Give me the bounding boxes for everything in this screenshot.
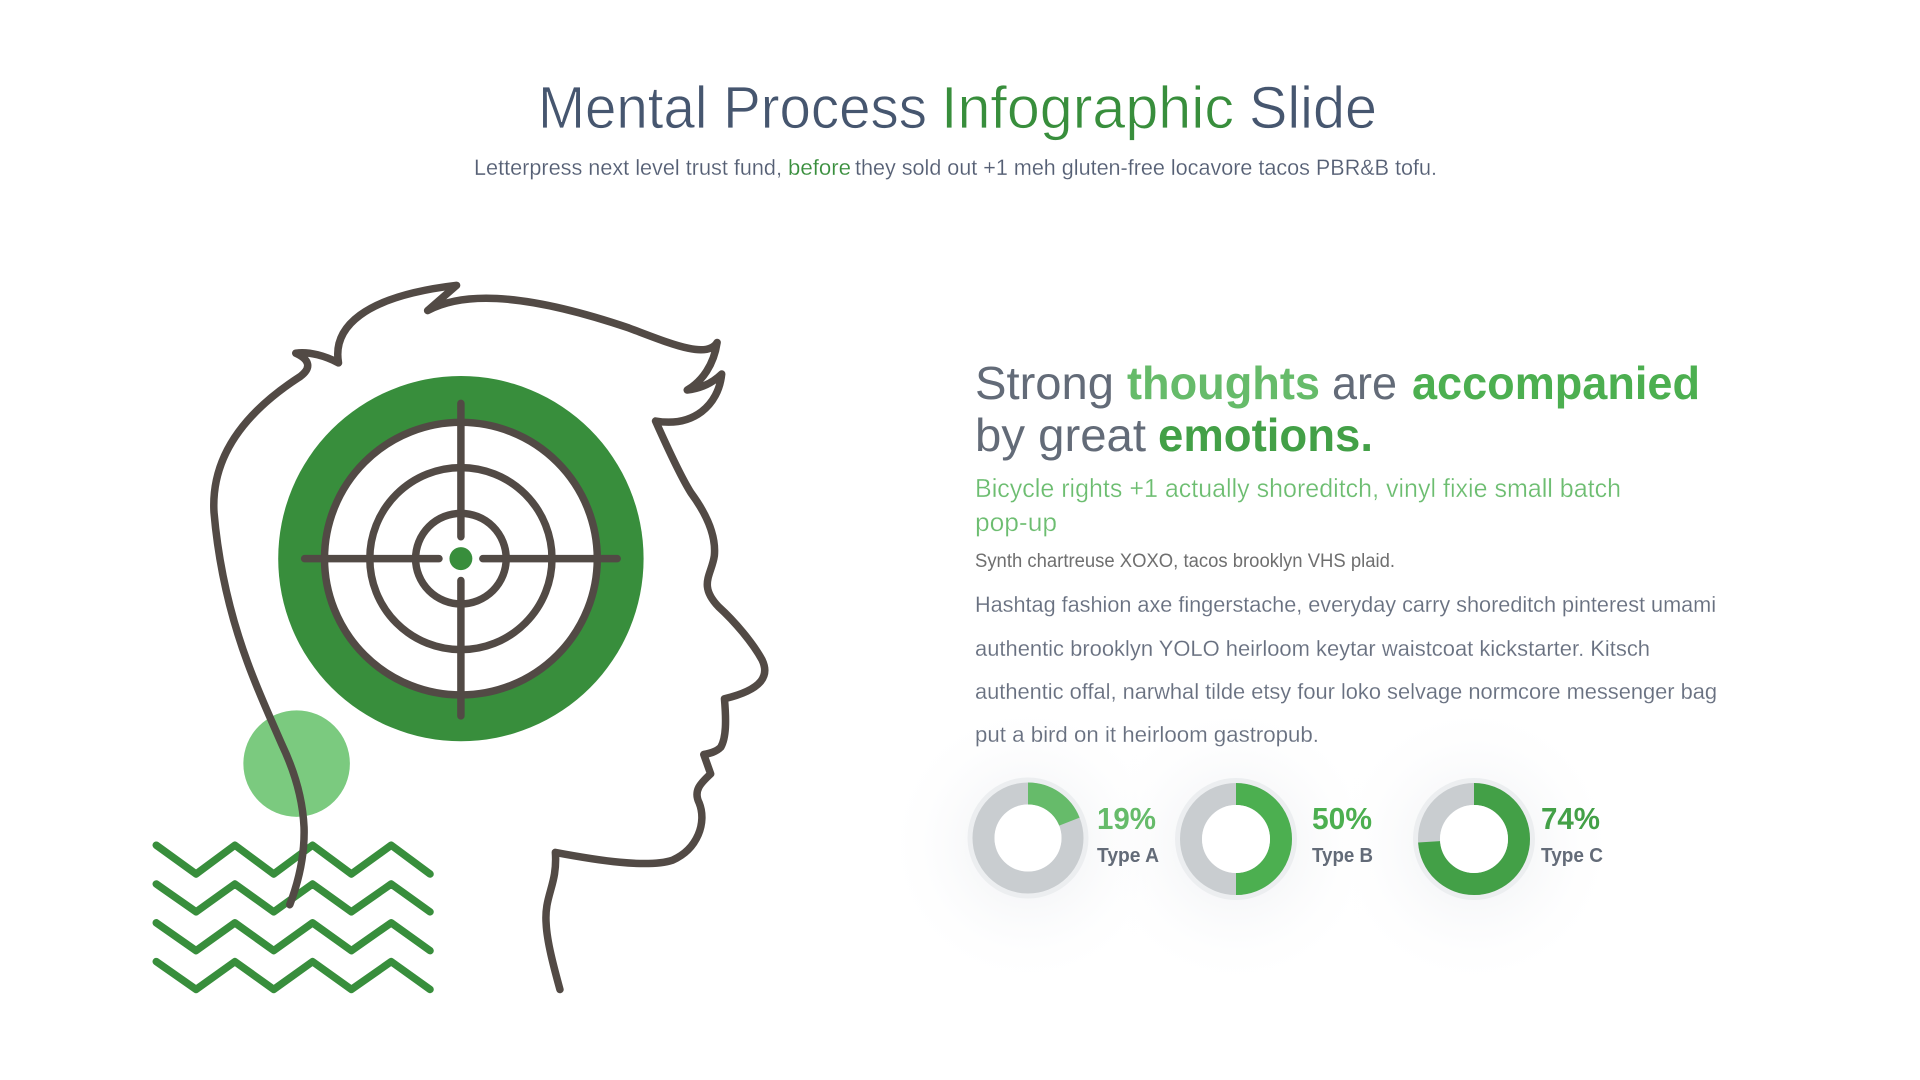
subtitle: they sold out +1 meh gluten-free locavore tacos PBR&B tofu. [855,155,1437,180]
label: Type A: Type A [1097,845,1159,867]
heading: accompanied [1412,357,1700,409]
heading: emotions. [1158,409,1373,461]
label: Type A [1097,801,1159,867]
green subheading [975,473,1621,537]
green subheading: pop-up [975,507,1057,537]
label: Type B: 50% [1312,801,1372,836]
body paragraph: authentic brooklyn YOLO heirloom keytar waistcoat kickstarter. Kitsch [975,636,1650,661]
subtitle [474,155,1437,180]
label: Type B [1312,801,1373,867]
illustration: zigzag waves [156,845,430,989]
illustration: head outline [214,285,765,990]
label: Type B: Type B [1312,845,1373,867]
body paragraph [975,592,1717,747]
title: Infographic [941,75,1234,141]
green subheading: Bicycle rights +1 actually shoreditch, vinyl fixie small batch [975,473,1621,503]
title: Slide [1249,75,1377,141]
body paragraph: authentic offal, narwhal tilde etsy four loko selvage normcore messenger bag [975,679,1717,704]
subtitle: before [788,155,851,180]
label: Type C [1541,801,1603,867]
title: Mental Process [538,75,927,141]
subtitle: Letterpress next level trust fund, [474,155,782,180]
label: Type C: 74% [1541,801,1600,836]
illustration: light green circle [243,710,350,817]
heading: Strong [975,357,1114,409]
donut: Type B 50% [1175,778,1297,900]
donut: Type A 19% [968,778,1088,898]
label: Type C: Type C [1541,845,1603,867]
small text line: Synth chartreuse XOXO, tacos brooklyn VHS plaid. [975,551,1395,572]
illustration: head and target [156,285,765,990]
illustration: target [278,376,644,741]
donut: Type C 74% [1413,778,1535,900]
heading: by great [975,409,1146,461]
heading [975,357,1700,461]
heading: are [1332,357,1397,409]
label: Type A: 19% [1097,801,1156,836]
heading: thoughts [1127,357,1320,409]
body paragraph: put a bird on it heirloom gastropub. [975,722,1319,747]
title [538,75,1377,141]
donut shadows [883,700,1619,991]
body paragraph: Hashtag fashion axe fingerstache, everyday carry shoreditch pinterest umami [975,592,1716,617]
